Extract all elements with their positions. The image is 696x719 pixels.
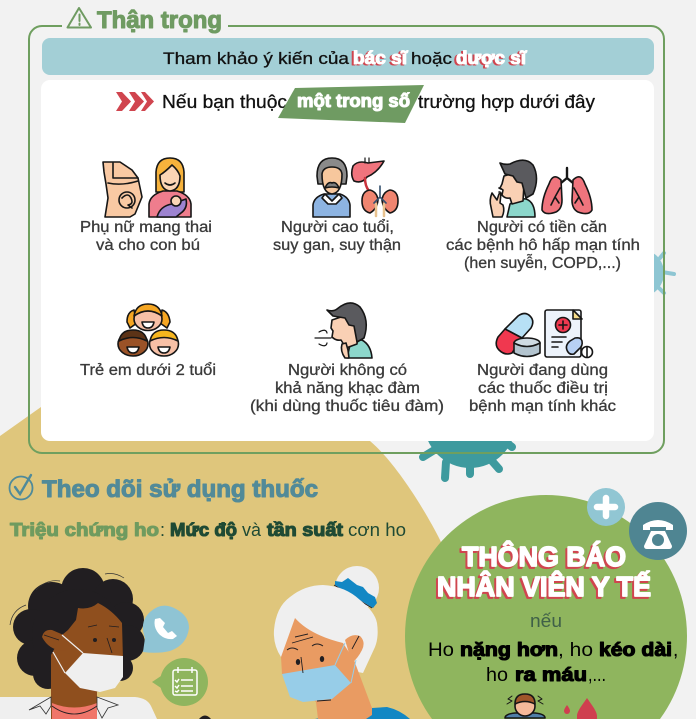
band: consult doctor: dược sĩ xyxy=(456,48,527,68)
text: warning symptoms: kéo dài xyxy=(599,640,672,661)
bubble: phone icon xyxy=(143,606,189,653)
icon: red chevrons xyxy=(116,92,154,111)
text: pregnant and breastfeeding: và cho con bú xyxy=(96,237,200,254)
icon: telephone circle xyxy=(629,502,687,560)
icon: three children xyxy=(118,304,178,356)
text: pregnant and breastfeeding xyxy=(80,219,212,254)
icon: blood drops xyxy=(564,698,597,719)
text: cough symptoms xyxy=(10,520,406,540)
text: taking other chronic medication: các thuốc điều trị xyxy=(478,380,608,397)
virus: light blue decoration xyxy=(616,249,674,297)
subheading: if you belong to one of these cases: trường hợp dưới đây xyxy=(418,92,595,112)
text: cough symptoms: và xyxy=(242,520,262,540)
text: warning symptoms xyxy=(428,640,678,686)
text: cough symptoms: : xyxy=(160,520,165,540)
text: elderly, liver and kidney disease: suy gan, suy thận xyxy=(273,237,401,254)
icon: coughing patient xyxy=(505,694,545,718)
panel: caution frame xyxy=(29,26,664,453)
heading: caution: Thận trọng xyxy=(97,7,222,34)
text: chronic respiratory disease: (hen suyễn, COPD,...) xyxy=(464,255,621,272)
icon: man unable to cough up phlegm xyxy=(315,303,372,358)
text: taking other chronic medication: bệnh mạn tính khác xyxy=(469,398,616,415)
heading: notify medical staff xyxy=(437,540,651,602)
icon: liver xyxy=(352,158,384,191)
subheading: if you belong to one of these cases: Nếu bạn thuộc xyxy=(162,92,287,112)
icon: kidneys xyxy=(362,186,398,216)
text: cough symptoms: tần suất xyxy=(267,520,343,540)
text: cough symptoms: Triệu chứng ho xyxy=(10,520,159,540)
text: warning symptoms: ,... xyxy=(588,665,606,686)
text: cough symptoms: cơn ho xyxy=(348,520,406,540)
band: consult doctor: Tham khảo ý kiến của xyxy=(163,49,350,68)
icon: coughing man xyxy=(490,160,536,217)
heading: notify medical staff: NHÂN VIÊN Y TẾ xyxy=(437,571,651,602)
text: warning symptoms: nặng hơn xyxy=(460,640,558,661)
text: warning symptoms: , xyxy=(673,640,678,661)
band: consult doctor: hoặc xyxy=(411,49,453,68)
subheading: if you belong to one of these cases xyxy=(162,85,595,123)
bubble: calendar checklist icon xyxy=(152,658,208,706)
icon: elderly man xyxy=(313,158,350,217)
text: elderly, liver and kidney disease xyxy=(273,219,401,254)
illustration: woman with mask, left xyxy=(0,568,157,719)
text: warning symptoms: ra máu xyxy=(515,665,587,686)
text: pregnant and breastfeeding: Phụ nữ mang thai xyxy=(80,219,212,236)
panel: notify medical staff circle xyxy=(405,495,687,719)
text: elderly, liver and kidney disease: Người cao tuổi, xyxy=(281,219,394,236)
icon: pregnant belly xyxy=(103,162,142,217)
text: children under 2: Trẻ em dưới 2 tuổi xyxy=(80,362,216,379)
illustration: elderly woman with mask, right xyxy=(274,566,410,719)
text: cannot cough up phlegm: (khi dùng thuốc tiêu đàm) xyxy=(250,398,444,415)
icon: medicines and prescription xyxy=(496,310,592,358)
band: consult doctor xyxy=(42,38,654,75)
text: chronic respiratory disease xyxy=(446,219,640,272)
band: consult doctor: bác sĩ xyxy=(353,48,408,68)
text: if: nếu xyxy=(530,611,562,631)
text: chronic respiratory disease: Người có tiền căn xyxy=(477,219,607,236)
icon: warning triangle xyxy=(68,8,91,28)
icon: lungs xyxy=(542,168,592,214)
text: cough symptoms: Mức độ xyxy=(170,520,237,540)
text: taking other chronic medication: Người đang dùng xyxy=(477,362,608,379)
virus: teal decoration xyxy=(423,376,516,478)
text: cannot cough up phlegm xyxy=(250,362,444,415)
text: cannot cough up phlegm: khả năng khạc đàm xyxy=(275,380,420,397)
text: warning symptoms: ho xyxy=(486,665,508,686)
text: warning symptoms: Ho xyxy=(428,640,454,661)
yellow background shape xyxy=(0,380,478,719)
text: chronic respiratory disease: các bệnh hô hấp mạn tính xyxy=(446,237,640,254)
text: cannot cough up phlegm: Người không có xyxy=(288,362,407,379)
heading: notify medical staff: THÔNG BÁO xyxy=(462,540,626,572)
icon: breastfeeding mother xyxy=(149,158,191,217)
decoration: dark object at bottom xyxy=(199,716,211,719)
text: taking other chronic medication xyxy=(469,362,616,415)
subheading: if you belong to one of these cases: một trong số xyxy=(297,91,410,111)
icon: plus circle xyxy=(587,488,625,526)
text: warning symptoms: , ho xyxy=(558,640,593,661)
panel: white risk groups card xyxy=(41,80,654,441)
heading: medication monitoring: Theo dõi sử dụng thuốc xyxy=(42,476,318,503)
icon: check circle xyxy=(10,475,32,500)
